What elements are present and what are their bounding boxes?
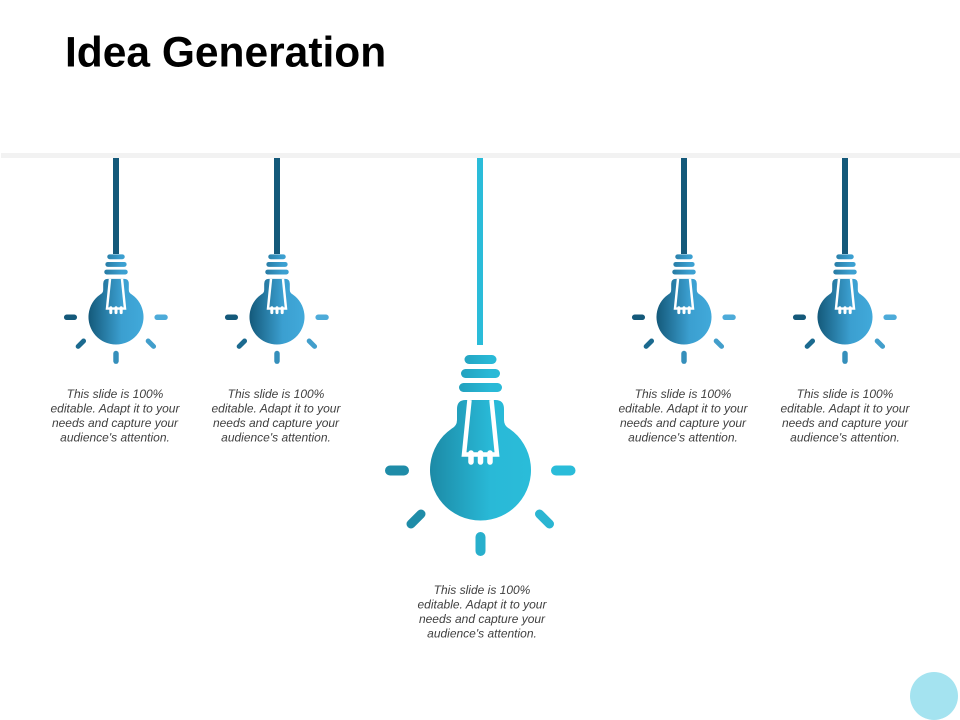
corner circle bbox=[910, 672, 958, 720]
text block 2: audience's attention. bbox=[221, 430, 331, 444]
text block 4: audience's attention. bbox=[628, 430, 738, 444]
bulb 3 (large centre) bbox=[390, 158, 570, 551]
text block 5: needs and capture your bbox=[782, 416, 909, 430]
text block 3: needs and capture your bbox=[419, 612, 546, 626]
text block 4: needs and capture your bbox=[620, 416, 747, 430]
text block 5: editable. Adapt it to your bbox=[781, 402, 910, 416]
text block 4: This slide is 100% bbox=[635, 387, 732, 401]
text block 3: editable. Adapt it to your bbox=[418, 598, 547, 612]
bulb 4 bbox=[635, 158, 733, 361]
text block 2: needs and capture your bbox=[213, 416, 340, 430]
bulb 1 bbox=[67, 158, 165, 361]
text block 3: audience's attention. bbox=[427, 626, 537, 640]
text block 1: editable. Adapt it to your bbox=[51, 402, 180, 416]
text block 5: This slide is 100% bbox=[797, 387, 894, 401]
title: Idea Generation bbox=[65, 30, 386, 76]
text block 2: editable. Adapt it to your bbox=[212, 402, 341, 416]
text block 1: audience's attention. bbox=[60, 430, 170, 444]
text block 3: This slide is 100% bbox=[434, 583, 531, 597]
text block 1: needs and capture your bbox=[52, 416, 179, 430]
bulb 5 bbox=[796, 158, 894, 361]
text block 4: editable. Adapt it to your bbox=[619, 402, 748, 416]
bulb 2 bbox=[228, 158, 326, 361]
text block 5: audience's attention. bbox=[790, 430, 900, 444]
text block 2: This slide is 100% bbox=[228, 387, 325, 401]
text block 1: This slide is 100% bbox=[67, 387, 164, 401]
